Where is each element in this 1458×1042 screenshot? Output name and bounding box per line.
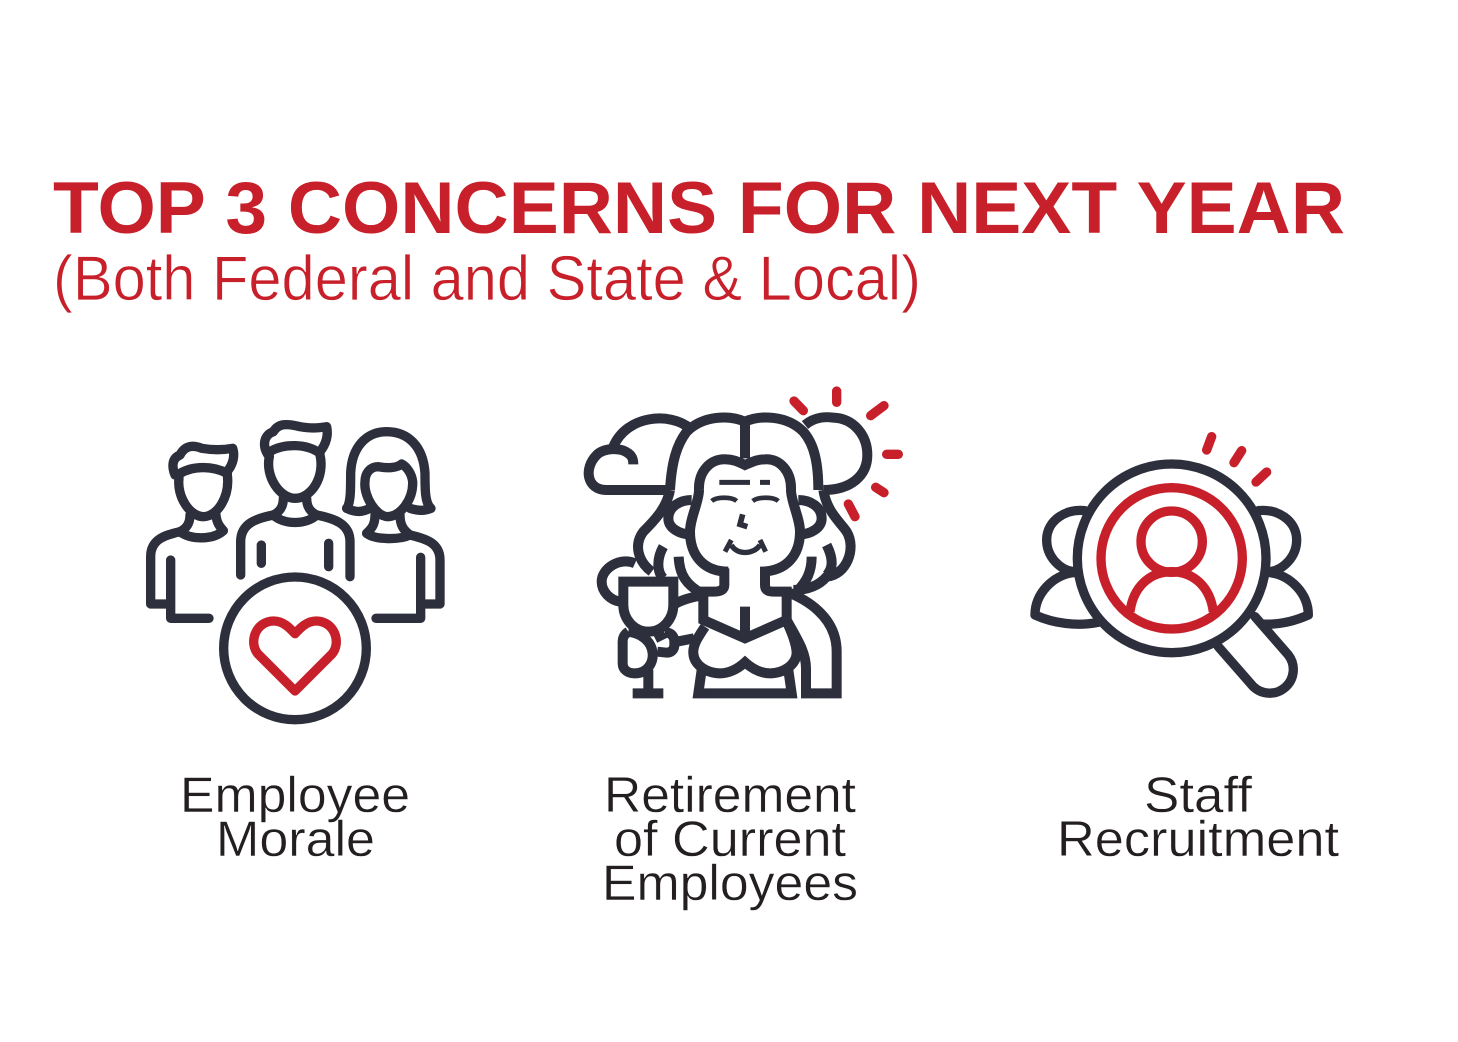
- center person: [241, 425, 350, 577]
- subtitle: (Both Federal and State & Local): [53, 244, 921, 314]
- face: [668, 459, 822, 572]
- right person: [347, 432, 440, 618]
- label: retirement of current employees: of Current: [614, 811, 846, 867]
- sparkle rays: [1207, 437, 1267, 482]
- icon: employee morale: [151, 425, 440, 720]
- label: employee morale: Employee: [180, 767, 410, 823]
- person in lens: [1101, 488, 1242, 629]
- icon: staff recruitment: [1035, 437, 1308, 693]
- label: staff recruitment: Recruitment: [1057, 811, 1339, 867]
- label: retirement of current employees: Employees: [602, 855, 858, 911]
- title: TOP 3 CONCERNS FOR NEXT YEAR: [53, 168, 1345, 249]
- circle badge: [224, 577, 366, 720]
- magnifier ring: [1077, 464, 1266, 653]
- label: staff recruitment: Staff: [1144, 767, 1252, 823]
- body: [673, 568, 837, 693]
- magnifier handle: [1218, 617, 1293, 693]
- label: retirement of current employees: [602, 767, 858, 911]
- icon: retirement: [589, 391, 898, 693]
- label: staff recruitment: [1057, 767, 1339, 867]
- label: employee morale: Morale: [216, 811, 375, 867]
- left person: [151, 446, 234, 618]
- icon: heart: [254, 621, 336, 691]
- side people: [1035, 510, 1308, 624]
- wine glass and hand: [602, 561, 694, 693]
- hat and hair: [589, 417, 867, 593]
- label: employee morale: [180, 767, 410, 867]
- label: retirement of current employees: Retirement: [604, 767, 856, 823]
- sparkle rays: [794, 391, 898, 517]
